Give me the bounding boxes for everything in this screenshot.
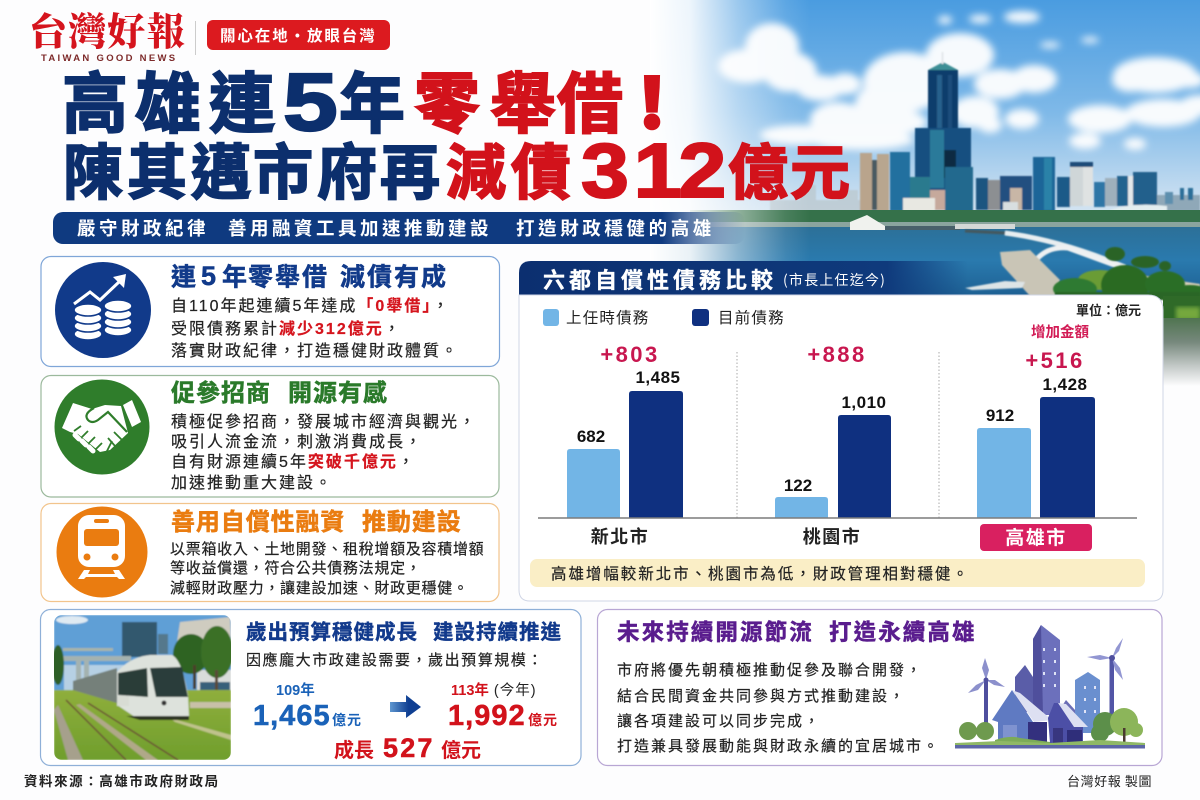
bars: 高雄市: 1,428 — [1042, 375, 1088, 394]
heading — [171, 258, 446, 294]
body text — [617, 661, 940, 755]
figure: 113 budget — [448, 681, 558, 732]
heading: 5 — [201, 261, 216, 291]
heading: 減債有成 — [340, 258, 446, 294]
main title: 5 — [283, 57, 338, 148]
icon: handshake — [54, 380, 150, 474]
city label: 高雄市 highlighted: 高雄市 — [1005, 523, 1067, 550]
heading: 推動建設 — [362, 502, 462, 537]
arrow — [390, 695, 421, 718]
pedestrian bridge and pier — [965, 231, 1200, 296]
hero photo: Kaohsiung skyline and harbour — [650, 0, 1200, 386]
body text: 減輕財政壓力，讓建設加速、財政更穩健。 — [170, 579, 469, 597]
right edge fading trees — [1163, 296, 1200, 386]
icon: coins and rising arrow — [55, 262, 151, 358]
callout: conclusion — [530, 559, 1145, 587]
legend: 目前債務 — [718, 306, 785, 328]
body text: 打造兼具發展動能與財政永續的宜居城市。 — [617, 738, 940, 755]
heading: 開源有感 — [288, 373, 388, 408]
legend: 上任時債務 — [566, 306, 650, 328]
growth text: 億元 — [441, 739, 481, 762]
city label: 高雄市 highlighted — [980, 523, 1092, 551]
bars: 桃園市: 1,010 — [841, 393, 887, 412]
panel: budget growth — [40, 610, 581, 766]
subtitle banner: 嚴守財政紀律 — [77, 215, 209, 241]
body text: 等收益償還，符合公共債務法規定， — [170, 559, 422, 577]
photo: light rail tram — [52, 615, 233, 760]
body text: 受限債務累計減少312億元， — [171, 320, 402, 338]
main title — [62, 51, 850, 214]
heading: 善用自償性融資 — [171, 502, 345, 537]
main title: 陳其邁市府再 — [63, 125, 440, 212]
figure: 113 budget: 億元 — [528, 712, 558, 728]
legend — [543, 306, 785, 328]
bars: 桃園市: 122 — [784, 476, 812, 495]
body text — [171, 297, 459, 360]
body text: 自110年起連續5年達成「0舉借」， — [171, 297, 450, 315]
body text: 吸引人流金流，刺激消費成長， — [171, 433, 423, 451]
panel: sustainable future — [598, 610, 1162, 766]
credit: 台灣好報 製圖 — [1067, 771, 1152, 790]
figure: 109 budget: 1,465 — [253, 700, 331, 732]
body text: 積極促參招商，發展城市經濟與觀光， — [171, 413, 477, 431]
heading: 未來持續開源節流 — [617, 615, 814, 647]
panel: self-liquidating financing — [41, 502, 499, 602]
bars: 新北市: 1,485 — [635, 368, 681, 387]
heading: 年零舉借 — [222, 258, 327, 294]
main title: 零舉借 — [414, 51, 623, 147]
main title: 減債 — [446, 125, 571, 212]
illustration: green city with wind turbines — [955, 625, 1145, 748]
intro text: 因應龐大市政建設需要，歲出預算規模： — [246, 649, 544, 670]
slogan badge — [207, 20, 390, 50]
panel: debt comparison chart — [519, 295, 1163, 601]
figure: 109 budget — [253, 681, 362, 732]
subtitle banner: 打造財政穩健的高雄 — [516, 215, 715, 241]
city label: 桃園市: 桃園市 — [803, 523, 861, 549]
bars: 新北市: 682 — [577, 427, 605, 446]
icon: train — [56, 506, 148, 598]
growth text: 成長 — [334, 738, 374, 762]
waterfront trees — [1053, 247, 1200, 305]
increase label: 增加金額 — [1031, 321, 1089, 342]
body text: 自有財源連續5年突破千億元， — [171, 452, 416, 471]
bars: 新北市 — [567, 342, 683, 518]
bars: 桃園市: +888 — [807, 342, 867, 367]
bars: 高雄市: 912 — [986, 406, 1014, 425]
callout: conclusion: 高雄增幅較新北市、桃園市為低，財政管理相對穩健。 — [551, 562, 970, 584]
panel: zero borrowing — [41, 256, 500, 366]
chart header: 六都自償性債務比較 — [519, 261, 968, 295]
main title: ！ — [619, 51, 685, 147]
chart header: 六都自償性債務比較: (市長上任迄今) — [783, 270, 886, 290]
slogan badge: 關心在地・放眼台灣 — [220, 24, 377, 46]
main title: 高雄連 — [62, 51, 275, 147]
unit label: 單位：億元 — [1076, 300, 1141, 319]
city label: 新北市: 新北市 — [591, 523, 649, 549]
source note: 資料來源：高雄市政府財政局 — [24, 770, 220, 790]
logo: 台灣好報: TAIWAN GOOD NEWS — [41, 53, 177, 64]
heading: 促參招商 — [171, 373, 271, 408]
body text: 市府將優先朝積極推動促參及聯合開發， — [617, 661, 923, 679]
body text: 結合民間資金共同參與方式推動建設， — [617, 688, 906, 705]
growth text: 527 — [383, 733, 435, 763]
heading: 建設持續推進 — [433, 615, 562, 645]
main title: 312 — [581, 128, 726, 214]
figure: 109 budget: 109年 — [276, 681, 315, 699]
figure: 113 budget: 113年 (今年) — [451, 681, 537, 699]
bars: 高雄市: +516 — [1025, 348, 1085, 373]
bars: 新北市: +803 — [600, 342, 660, 367]
panel: investment promotion — [41, 373, 499, 497]
bars: 桃園市 — [775, 342, 891, 518]
body text — [170, 540, 484, 597]
body text: 以票箱收入、土地開發、租稅增額及容積增額 — [170, 540, 484, 558]
bars: 高雄市 — [977, 348, 1095, 518]
body text: 加速推動重大建設。 — [171, 474, 333, 492]
body text — [171, 413, 477, 492]
body text: 落實財政紀律，打造穩健財政體質。 — [171, 341, 459, 360]
heading: 歲出預算穩健成長 — [246, 615, 418, 645]
figure: 109 budget: 億元 — [332, 712, 362, 728]
main title: 億元 — [728, 125, 850, 212]
subtitle banner — [53, 212, 745, 244]
figure: 113 budget: 1,992 — [448, 700, 526, 732]
heading: 打造永續高雄 — [829, 615, 977, 647]
subtitle banner: 善用融資工具加速推動建設 — [228, 215, 492, 241]
growth text — [334, 733, 481, 763]
body text: 讓各項建設可以同步完成， — [617, 712, 821, 730]
logo: 台灣好報: 台灣好報 — [29, 1, 186, 56]
chart header: 六都自償性債務比較: 六都自償性債務比較 — [543, 263, 777, 295]
heading: 連 — [171, 258, 196, 294]
main title: 年 — [339, 51, 405, 147]
skyline — [770, 52, 1200, 214]
